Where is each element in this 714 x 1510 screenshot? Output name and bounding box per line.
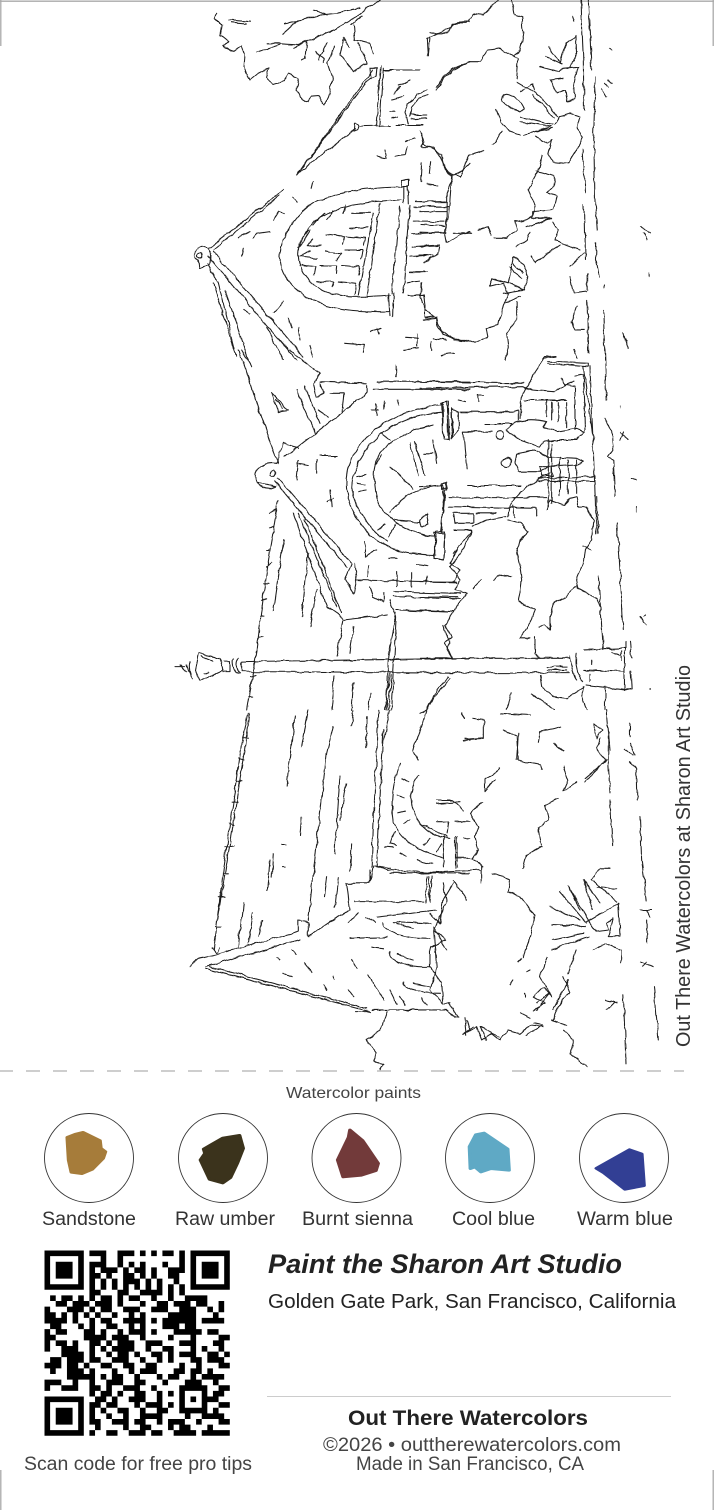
swatch: cool blue bbox=[446, 1114, 535, 1230]
swatch: warm blue bbox=[577, 1114, 673, 1230]
fold line bbox=[0, 1070, 684, 1072]
hedges, palm plants and sidewalk, upper section bbox=[420, 0, 650, 360]
illustration: line drawing of the Sharon Art Studio bbox=[174, 0, 658, 1070]
rotated caption: Out There Watercolors at Sharon Art Studio bbox=[673, 665, 695, 1047]
swatch: sandstone bbox=[42, 1114, 136, 1230]
long roof, near gable with pointed windows bbox=[190, 710, 470, 1070]
top tree, far gable and arched window bbox=[195, 0, 470, 360]
swatch: warm blue: Warm blue bbox=[577, 1209, 673, 1230]
copyright and website: ©2026 • outtherewatercolors.com bbox=[323, 1435, 621, 1456]
brand name: Out There Watercolors bbox=[348, 1407, 588, 1430]
title: Paint the Sharon Art Studio bbox=[268, 1249, 622, 1279]
swatch: cool blue: Cool blue bbox=[452, 1209, 535, 1230]
QR caption: Scan code for free pro tips bbox=[24, 1454, 252, 1475]
made in line: Made in San Francisco, CA bbox=[356, 1454, 584, 1475]
swatch: sandstone: Sandstone bbox=[42, 1209, 136, 1230]
swatch: burnt sienna: Burnt sienna bbox=[302, 1209, 413, 1230]
central gable, arched entry and roof bbox=[174, 350, 470, 710]
swatch: burnt sienna bbox=[302, 1114, 413, 1230]
location subtitle: Golden Gate Park, San Francisco, California bbox=[268, 1291, 677, 1313]
stairway, two figures, shrubs and lamp post base bbox=[420, 350, 650, 710]
QR code bbox=[44, 1253, 230, 1433]
lower hedges, palm plant and sidewalk bbox=[420, 710, 658, 1067]
swatch: raw umber bbox=[175, 1114, 276, 1230]
paints heading: Watercolor paints bbox=[286, 1085, 421, 1102]
swatches row bbox=[42, 1114, 673, 1230]
swatch: raw umber: Raw umber bbox=[175, 1209, 276, 1230]
